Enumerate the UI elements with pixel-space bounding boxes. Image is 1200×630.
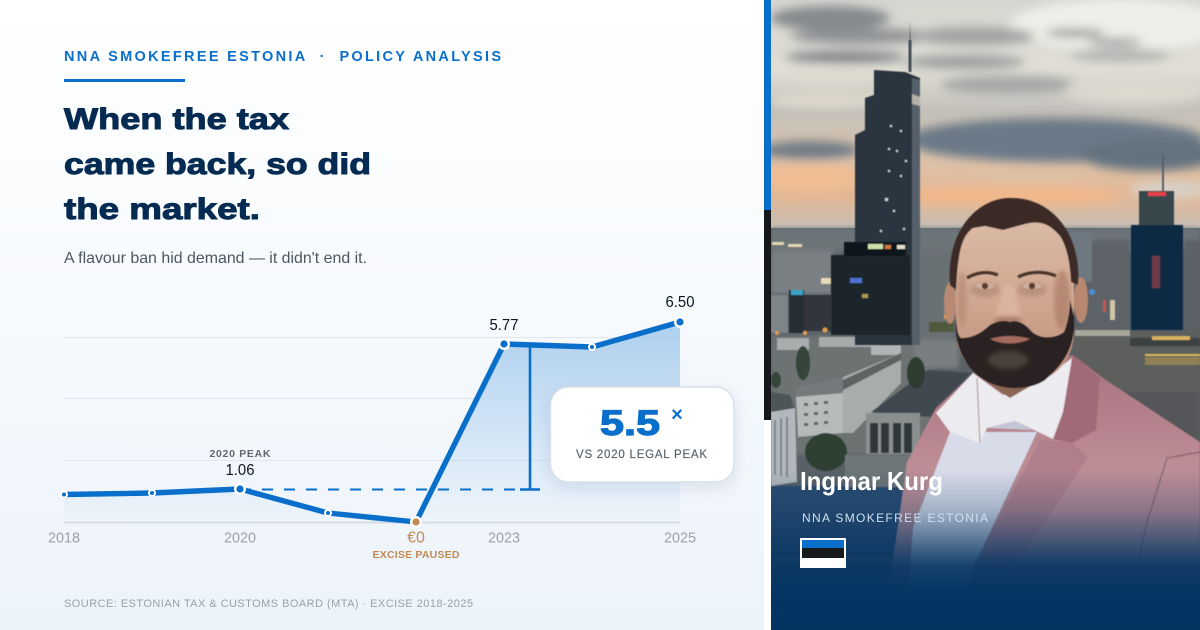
- callout multiplier sign: ×: [671, 404, 683, 426]
- face shading: [957, 270, 1070, 330]
- jacket dark shoulder and lapel shading: [1053, 355, 1100, 443]
- eyebrows: [967, 272, 1056, 278]
- axis labels: 2018: [48, 530, 80, 546]
- collar: [936, 358, 1072, 443]
- city ground: [771, 228, 1200, 575]
- peak label: 2020 PEAK: [210, 448, 271, 460]
- beard texture: [988, 351, 1028, 369]
- sky: [771, 0, 1200, 230]
- axis labels: 2025: [664, 530, 696, 546]
- zero label: €0: [407, 530, 425, 546]
- area under line: [64, 322, 680, 522]
- source note: SOURCE: ESTONIAN TAX & CUSTOMS BOARD (MTA) · EXCISE 2018-2025: [64, 598, 473, 610]
- axis labels: [48, 530, 696, 546]
- foreground buildings: [771, 337, 971, 556]
- excise paused label: EXCISE PAUSED: [372, 549, 460, 561]
- right tower: [1072, 155, 1183, 330]
- data points: [60, 316, 686, 528]
- title: When the tax: [64, 103, 289, 136]
- eyes: [976, 283, 1041, 289]
- callout value: 5.5: [600, 404, 660, 443]
- value labels: 1.06: [226, 462, 255, 479]
- eyebrow: publisher and section: NNA SMOKEFREE ESTONIA · POLICY ANALYSIS: [64, 49, 501, 65]
- subtitle: A flavour ban hid demand — it didn't end it.: [64, 250, 367, 267]
- mouth: [990, 336, 1030, 344]
- accent rule: [64, 79, 185, 82]
- speaker organisation: NNA SMOKEFREE ESTONIA: [802, 511, 988, 525]
- ears: [944, 282, 956, 324]
- value labels: [226, 294, 695, 479]
- clouds: [755, 0, 1200, 205]
- data line: [64, 322, 680, 522]
- callout: 5.5x multiple: [550, 387, 734, 482]
- hair: [950, 198, 1078, 290]
- axis labels: 2023: [488, 530, 520, 546]
- panel: left background: [0, 0, 764, 630]
- axis labels: 2020: [224, 530, 256, 546]
- shirt: [910, 431, 1038, 564]
- callout caption: VS 2020 LEGAL PEAK: [576, 449, 707, 461]
- photo: city skyline and portrait: [755, 0, 1200, 630]
- line chart: excise revenue 2018-2025: [48, 294, 696, 561]
- city lights and roof bands: [771, 242, 1200, 365]
- speaker name: Ingmar Kurg: [800, 466, 943, 496]
- bottom fade overlay: [771, 476, 1200, 630]
- portrait: [893, 197, 1200, 571]
- value labels: 5.77: [490, 317, 519, 334]
- divider: Estonian flag stripe: [764, 0, 771, 630]
- value labels: 6.50: [666, 294, 695, 311]
- icon: Estonian flag: [800, 538, 846, 568]
- dashed reference line at 2020 peak: [240, 488, 520, 490]
- multiple bracket: [520, 346, 540, 490]
- title: the market.: [64, 193, 260, 226]
- beard: [956, 300, 1074, 388]
- title: came back, so did: [64, 148, 371, 181]
- tower: [831, 20, 920, 345]
- jacket: [893, 354, 1200, 564]
- title: [64, 103, 371, 226]
- face: [954, 222, 1075, 376]
